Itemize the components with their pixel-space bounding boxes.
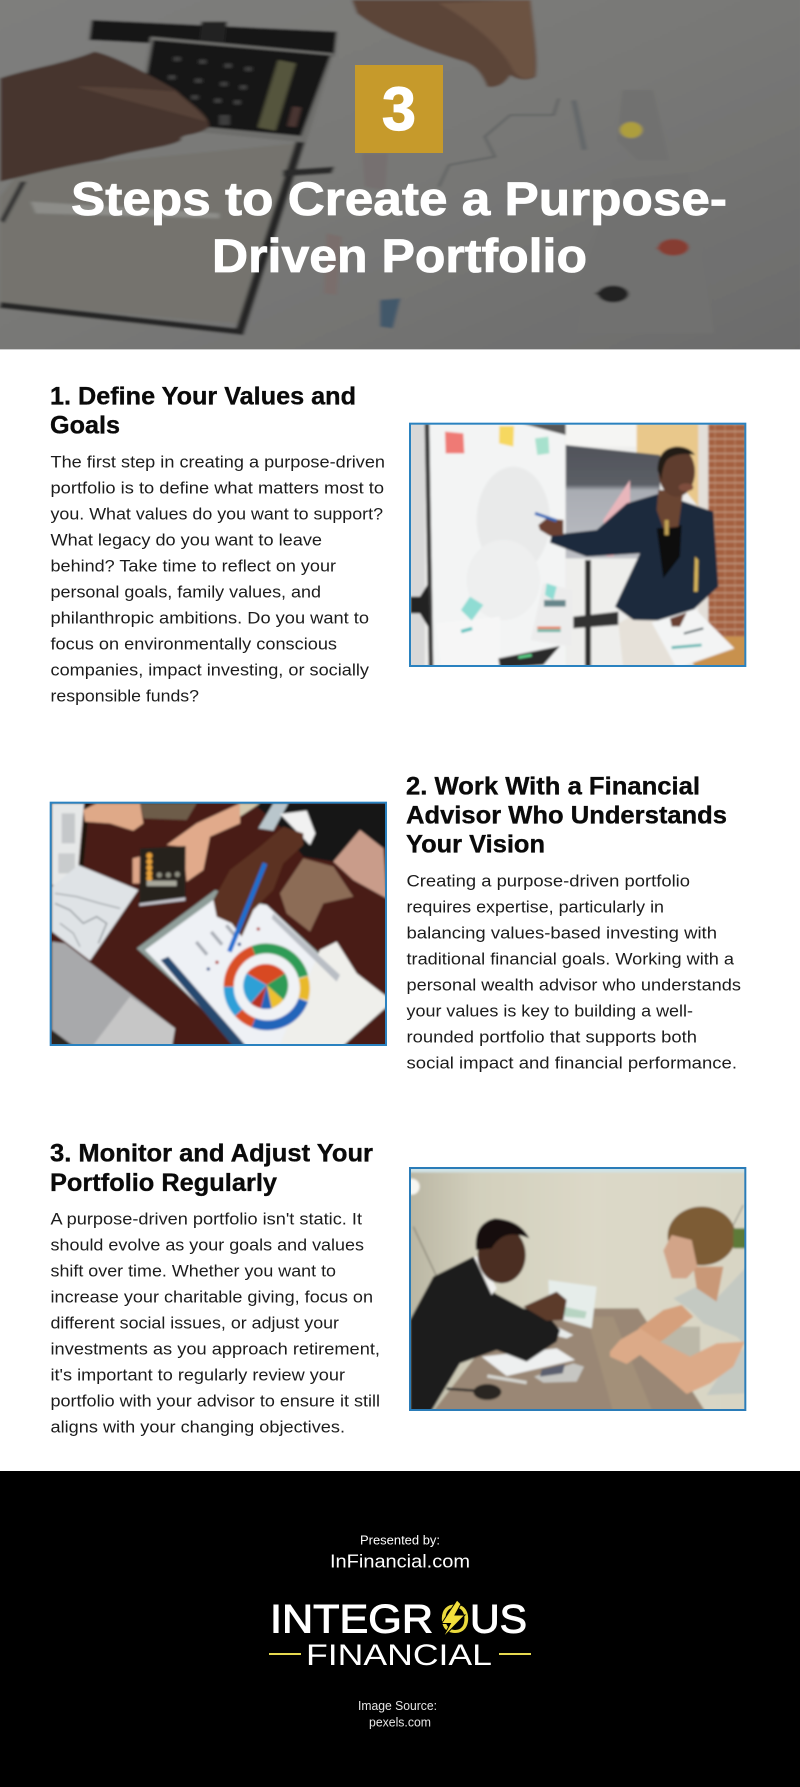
heading: step 2: Your Vision (406, 830, 545, 858)
text block: step 3 body: it's important to regularly review your (50, 1366, 346, 1384)
title: Driven Portfolio (212, 229, 587, 282)
presented by: InFinancial.com (330, 1551, 470, 1572)
logo: Integrous Financial: INTEGR (270, 1598, 433, 1642)
text block: step 2 body: social impact and financial performance. (406, 1054, 737, 1072)
image source: pexels.com (369, 1716, 431, 1730)
heading: step 1: 1. Define Your Values and (50, 382, 356, 410)
text block: step 3 body: increase your charitable giving, focus on (50, 1288, 373, 1306)
panel: header (0, 0, 800, 353)
icon: lightning bolt (442, 1600, 465, 1638)
photo border (410, 424, 745, 666)
heading: step 1 (50, 382, 356, 440)
text block: step 3 body: A purpose-driven portfolio isn't static. It (50, 1210, 362, 1228)
text block: step 3 body: different social issues, or adjust your (50, 1314, 340, 1332)
logo: Integrous Financial: FINANCIAL (306, 1639, 492, 1672)
photo: financial documents on desk (47, 800, 390, 1050)
heading: step 3: Portfolio Regularly (50, 1169, 277, 1197)
title: Steps to Create a Purpose- (71, 172, 727, 225)
presented by (330, 1532, 470, 1572)
logo: Integrous Financial: US (470, 1598, 527, 1642)
text block: step 1 body: What legacy do you want to leave (50, 532, 322, 550)
presented by: Presented by: (360, 1532, 440, 1547)
panel: step 3 (50, 1140, 750, 1436)
number badge: 3 (382, 75, 416, 143)
text block: step 1 body: personal goals, family values, and (50, 584, 321, 602)
panel: step 2 (47, 772, 741, 1072)
text block: step 2 body: personal wealth advisor who understands (406, 976, 741, 994)
text block: step 3 body: should evolve as your goals and values (50, 1236, 364, 1254)
number badge (355, 65, 443, 153)
panel: step 1 (50, 382, 750, 706)
text block: step 3 body: aligns with your changing objectives. (50, 1418, 345, 1436)
photo border (51, 803, 386, 1045)
panel: footer (0, 1471, 800, 1787)
text block: step 1 body: The first step in creating a purpose-driven (50, 454, 385, 472)
text block: step 1 body: responsible funds? (50, 688, 199, 706)
text block: step 3 body: investments as you approach retirement, (50, 1340, 380, 1358)
text block: step 2 body: balancing values-based investing with (406, 924, 717, 942)
heading: step 3 (50, 1140, 373, 1197)
header background photo (0, 0, 800, 353)
photo border (410, 1168, 745, 1410)
text block: step 1 body: focus on environmentally conscious (50, 636, 337, 654)
text block: step 2 body: Creating a purpose-driven portfolio (406, 872, 690, 890)
text block: step 3 body: shift over time. Whether you want to (50, 1262, 336, 1280)
image source: Image Source: (358, 1699, 437, 1713)
heading: step 3: 3. Monitor and Adjust Your (50, 1140, 373, 1168)
text block: step 2 body: rounded portfolio that supports both (406, 1028, 697, 1046)
text block: step 1 body: behind? Take time to reflect on your (50, 558, 337, 576)
text block: step 1 body: portfolio is to define what matters most to (50, 480, 384, 498)
logo: Integrous Financial (269, 1598, 531, 1672)
heading: step 2: Advisor Who Understands (406, 802, 727, 830)
text block: step 1 body: companies, impact investing, or socially (50, 662, 370, 680)
photo: advisor meeting client (404, 1165, 750, 1415)
heading: step 1: Goals (50, 412, 120, 440)
text block: step 3 body (50, 1210, 380, 1436)
text block: step 2 body: requires expertise, particularly in (406, 898, 664, 916)
heading: step 2 (406, 772, 727, 858)
title (71, 172, 727, 282)
image source (358, 1699, 437, 1730)
text block: step 1 body: you. What values do you want to support? (50, 506, 383, 524)
logo: Integrous Financial: O (440, 1598, 470, 1642)
photo: presenter at whiteboard (407, 420, 750, 670)
text block: step 2 body (406, 872, 741, 1072)
heading: step 2: 2. Work With a Financial (406, 772, 700, 800)
text block: step 3 body: portfolio with your advisor to ensure it still (50, 1392, 380, 1410)
text block: step 1 body: philanthropic ambitions. Do you want to (50, 610, 369, 628)
text block: step 2 body: traditional financial goals. Working with a (406, 950, 735, 968)
text block: step 1 body (50, 454, 385, 706)
text block: step 2 body: your values is key to building a well- (406, 1002, 693, 1020)
